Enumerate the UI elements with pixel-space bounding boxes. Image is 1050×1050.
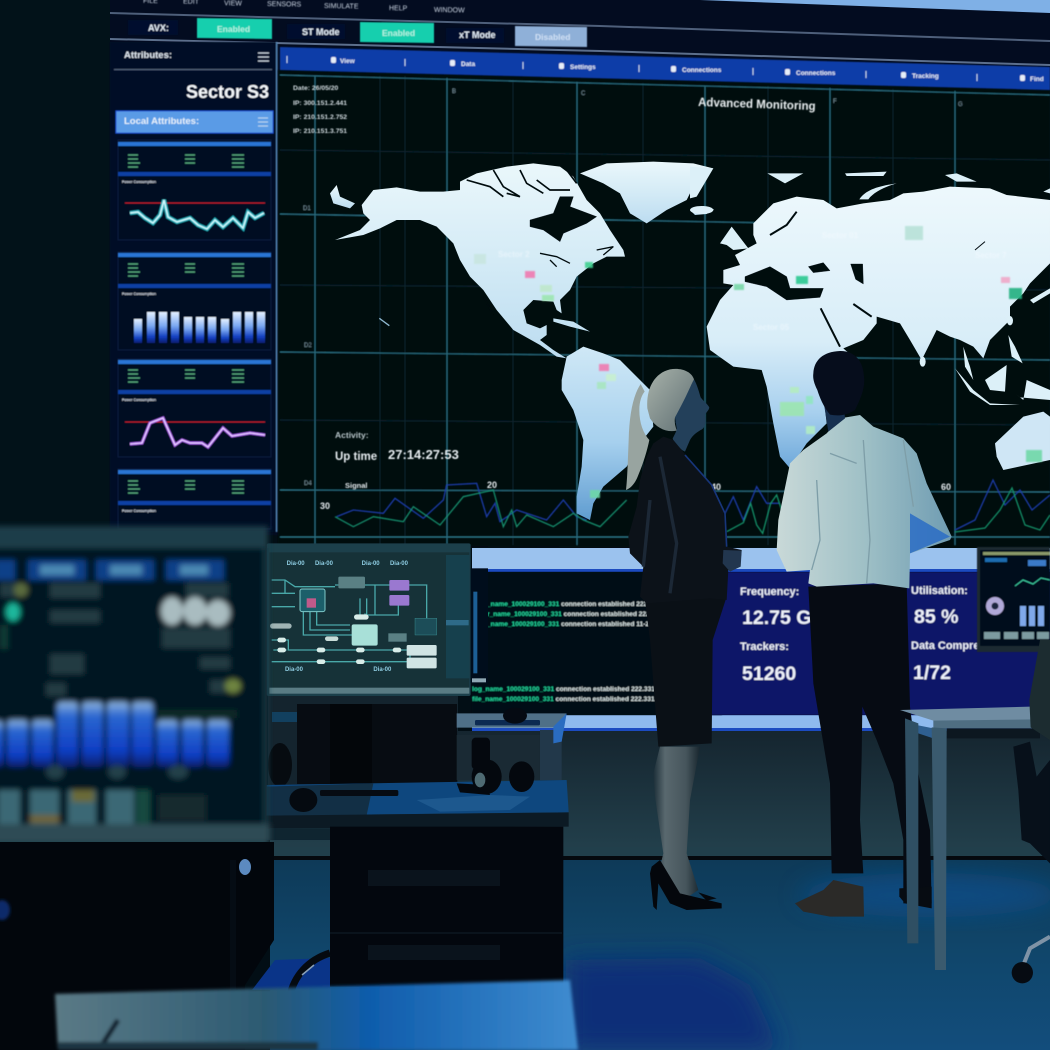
uptime readout: 60 (941, 482, 951, 492)
shoe left (795, 880, 864, 917)
central monitor (267, 543, 488, 696)
attributes panel: Sector S3 (186, 82, 269, 102)
central monitor: Dia-00 (390, 561, 409, 567)
attributes panel (110, 42, 278, 532)
uptime readout: Signal (345, 481, 368, 490)
high heels (650, 860, 722, 910)
menu bar: SENSORS (267, 1, 302, 9)
chart panel: line chart cyan (118, 140, 271, 240)
mouse (289, 788, 317, 812)
stats screen: Utilisation: (911, 585, 968, 597)
map region labels: Sector 05 (753, 323, 790, 332)
Iceland (690, 206, 714, 215)
date and IP text: Date: 26/05/20 (293, 85, 339, 92)
connection log screen: log_name_100029100_331 connection established 222.331.1.165 (472, 686, 674, 693)
uptime readout: 20 (487, 480, 497, 490)
navigation bar: Find (1030, 76, 1044, 83)
mode toggles: ST Mode (302, 27, 340, 37)
stats screen: Trackers: (740, 641, 789, 653)
hair (647, 369, 694, 431)
chart panel: bar chart (118, 252, 271, 350)
menu bar: VIEW (224, 0, 242, 8)
attributes panel: Attributes: (124, 50, 172, 61)
menu bar: SIMULATE (324, 3, 359, 11)
skirt (645, 597, 727, 747)
lower wall panels (270, 731, 1050, 861)
navigation bar (280, 47, 1050, 90)
menu bar (143, 0, 465, 14)
map highlights (474, 226, 1042, 498)
man (777, 351, 952, 917)
trousers (808, 583, 932, 903)
map background and grid: F (833, 99, 837, 105)
date and IP text: IP: 210.151.3.751 (293, 128, 347, 135)
central monitor: Dia-00 (362, 561, 380, 567)
Hudson Bay and arctic channels (467, 170, 613, 315)
mode toggles: xT Mode (459, 30, 496, 40)
map background and grid: D1 (303, 206, 311, 212)
navigation bar: Data (461, 61, 475, 68)
mode toggles: Enabled (382, 28, 415, 38)
islands (690, 167, 1050, 405)
left foreground monitor (0, 526, 270, 848)
date and IP text (293, 85, 347, 135)
map region labels: Sector 7 (975, 251, 1007, 260)
map background and grid: G (958, 102, 963, 108)
chart panel: line chart purple (118, 359, 271, 457)
keyboard (320, 790, 398, 796)
navigation bar: Connections (682, 67, 722, 74)
map region labels: Sector 01 (822, 231, 859, 240)
Greenland (580, 162, 713, 223)
world map: Eurasia and Africa (690, 167, 1050, 470)
shirt (777, 415, 952, 588)
chart panel: line chart cyan: Power Consumption (122, 180, 156, 184)
chart panel: bar chart: Power Consumption (122, 292, 156, 296)
map background and grid: D4 (304, 481, 312, 487)
signal chart (335, 480, 1050, 533)
mode toggles (128, 18, 587, 47)
shoe right (899, 887, 932, 908)
mid desk with mouse (457, 708, 567, 780)
woman (626, 369, 742, 910)
North America (335, 163, 625, 358)
attributes panel: Local Attributes: (124, 116, 199, 127)
stats screen: Data Compre (911, 640, 979, 652)
date and IP text: IP: 210.151.2.752 (293, 114, 347, 121)
video wall (110, 0, 1050, 560)
head (813, 351, 864, 415)
shirt reflection (910, 513, 950, 553)
map background and grid: D2 (304, 343, 312, 349)
stats screen: 12.75 G (742, 607, 811, 629)
Alaska islands (330, 185, 355, 208)
hand (723, 550, 742, 572)
map background and grid (278, 70, 1050, 550)
blurred blue bars (0, 702, 229, 767)
navigation bar: Tracking (912, 73, 939, 80)
neck (823, 400, 845, 432)
mid monitor stand (268, 695, 458, 789)
stats screen: 85 % (914, 606, 958, 628)
legs (653, 747, 700, 900)
navigation bar: Settings (570, 64, 596, 71)
inland seas (745, 212, 985, 347)
chart panel: fourth cropped: Power Consumption (122, 509, 156, 513)
foreground table (55, 980, 578, 1050)
cabinet drawer lines (330, 870, 562, 960)
chair arm (252, 953, 330, 996)
date and IP text: IP: 300.151.2.441 (293, 100, 347, 107)
small right monitor (977, 547, 1050, 652)
jacket (628, 437, 742, 603)
connection log screen: _name_100029100_331 connection established 222.37 (486, 601, 657, 608)
navigation bar: View (340, 58, 356, 65)
uptime readout: 40 (711, 482, 721, 492)
stats screen: Frequency: (740, 586, 799, 598)
floor (270, 860, 1050, 1050)
stats screen: 51260 (742, 663, 796, 685)
headphones (457, 738, 534, 795)
map region labels: Sector 2 (498, 250, 530, 259)
connection log screen: r_name_100029100_331 connection established 222.3 (487, 611, 656, 618)
ponytail (626, 384, 649, 490)
mode toggles: Enabled (217, 24, 250, 34)
mode toggles: Disabled (535, 32, 570, 42)
map background and grid: B (452, 89, 456, 95)
South America (562, 347, 653, 520)
Hawaii (379, 318, 389, 326)
right chair and seated person (1012, 640, 1050, 983)
mode toggles: AVX: (148, 23, 169, 33)
uptime readout: Up time (335, 451, 377, 463)
connection log screen: _name_100029100_331 connection established 11-22-222 (486, 621, 666, 628)
chart panel: fourth cropped (118, 469, 271, 529)
right desk (900, 707, 1040, 970)
papers (417, 795, 530, 812)
left foreground cabinet (0, 842, 274, 1050)
menu bar: HELP (389, 5, 408, 12)
shirt folds (812, 440, 913, 583)
map background and grid: C (581, 91, 586, 97)
Cuba and Caribbean (553, 318, 590, 332)
menu bar: WINDOW (434, 7, 465, 14)
map title: Advanced Monitoring (698, 97, 816, 113)
Australia (995, 412, 1050, 470)
central monitor: Dia-00 (285, 667, 304, 673)
central monitor: Dia-00 (287, 561, 305, 567)
chart panel: line chart purple: Power Consumption (122, 398, 156, 402)
uptime readout: 30 (320, 501, 330, 511)
lower light band (472, 548, 1050, 731)
central desk (267, 738, 569, 987)
stats screen: 1/72 (913, 662, 951, 684)
connection log screen: file_name_100029100_331 connection established 222.331.1.165 (472, 696, 673, 703)
central monitor: Dia-00 (373, 667, 392, 673)
map region labels (498, 231, 1007, 332)
world map: Americas (330, 162, 714, 520)
connection log screen (472, 572, 722, 715)
uptime readout: 27:14:27:53 (388, 447, 459, 462)
stats screen (700, 572, 1050, 715)
central monitor: Dia-00 (315, 561, 334, 567)
uptime readout: Activity: (335, 430, 369, 440)
navigation bar: Connections (796, 70, 836, 77)
face (673, 379, 709, 452)
uptime readout (320, 430, 951, 511)
